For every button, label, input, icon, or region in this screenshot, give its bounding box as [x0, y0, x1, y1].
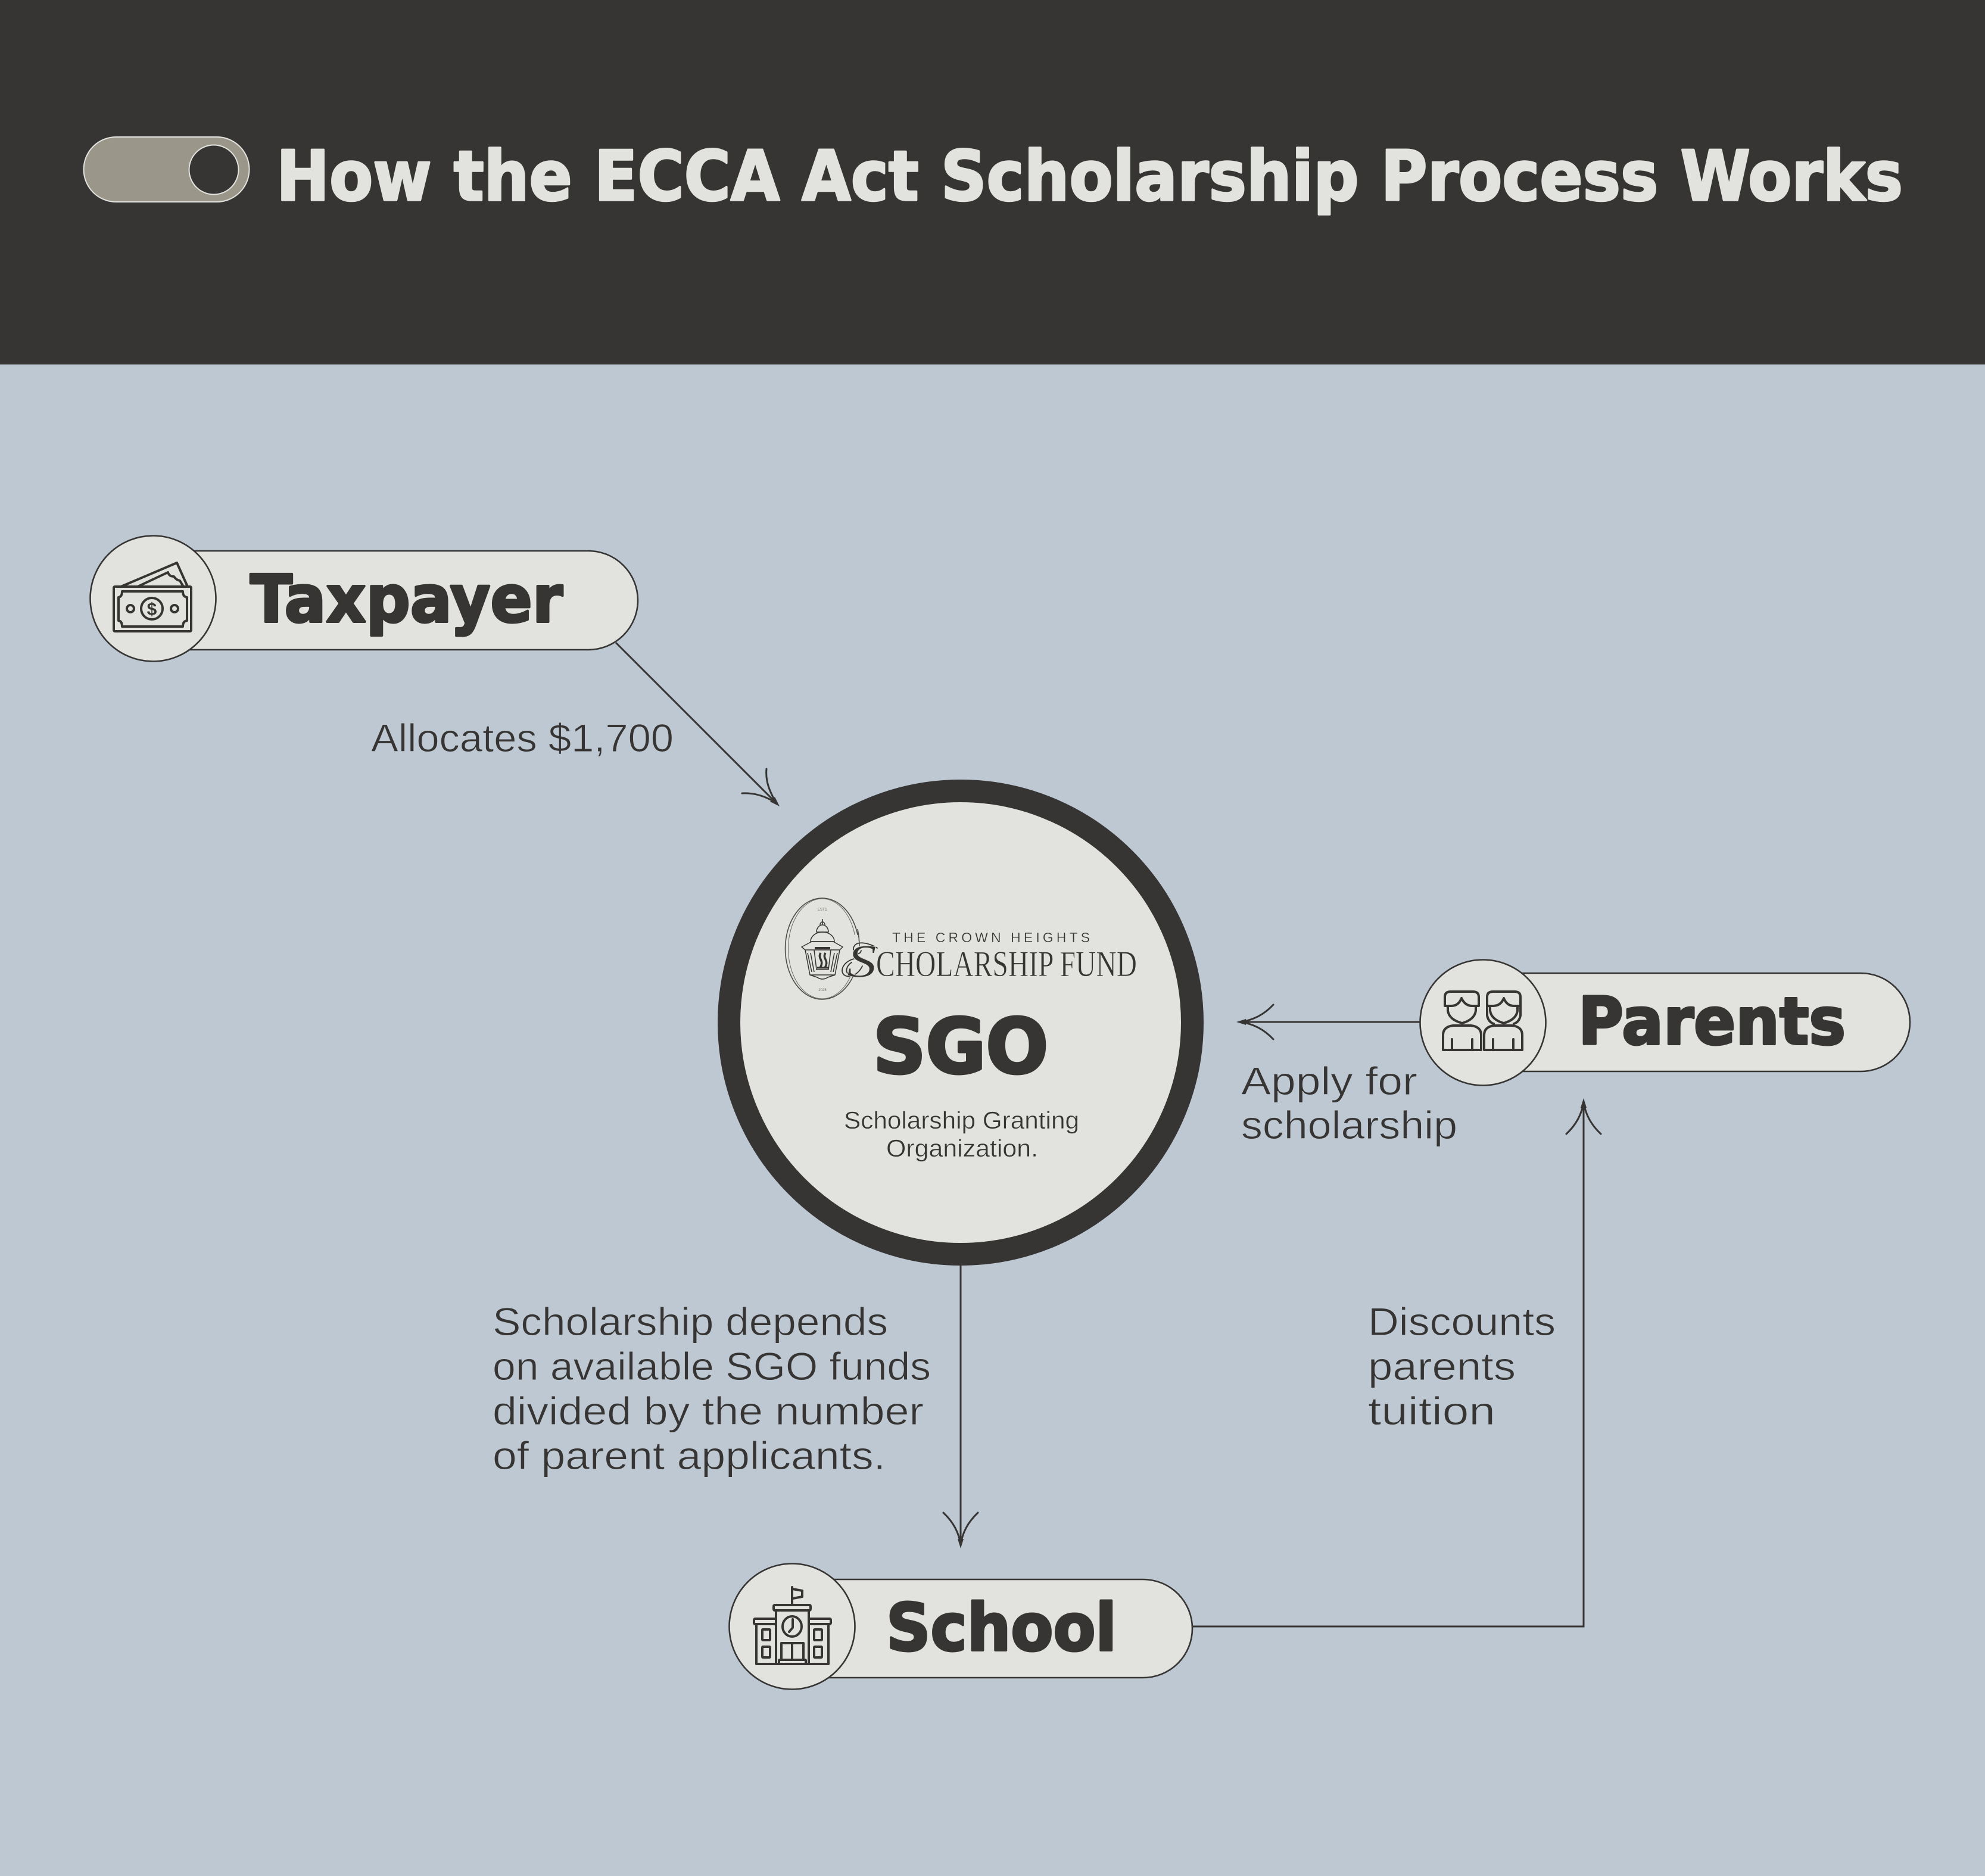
- label: scholarship depends: Scholarship depends: [493, 1300, 888, 1344]
- panel: school: [729, 1564, 1192, 1689]
- label: scholarship depends: on available SGO funds: [493, 1344, 931, 1388]
- text: SGO description: Organization.: [886, 1135, 1038, 1162]
- header band: [0, 0, 1985, 364]
- swash ornaments on script S: [842, 943, 877, 976]
- panel: parents: [1420, 960, 1910, 1085]
- label: apply for scholarship: scholarship: [1241, 1103, 1457, 1147]
- logo: Crown Heights Scholarship Fund: [785, 898, 1137, 999]
- label: school: School: [886, 1590, 1117, 1666]
- heading: SGO: SGO: [873, 1002, 1048, 1090]
- icon: money: $: [147, 600, 157, 619]
- label: apply for scholarship: Apply for: [1241, 1059, 1417, 1103]
- icon: toggle switch: [83, 137, 249, 202]
- label: scholarship depends: [493, 1300, 931, 1478]
- icon: parents: [1443, 992, 1522, 1050]
- label: scholarship depends: divided by the number: [493, 1389, 924, 1433]
- label: apply for scholarship: [1241, 1059, 1457, 1147]
- logo: Crown Heights Scholarship Fund: S: [847, 935, 877, 987]
- panel: taxpayer: [91, 536, 638, 661]
- logo: Crown Heights Scholarship Fund: CHOLARSHIP FUND: [876, 945, 1137, 984]
- label: discounts parents tuition: Discounts: [1368, 1300, 1556, 1344]
- text: SGO description: Scholarship Granting: [844, 1107, 1079, 1134]
- panel: SGO circle: [729, 791, 1192, 1254]
- logo: Crown Heights Scholarship Fund: 2025: [818, 989, 827, 992]
- label: discounts parents tuition: [1368, 1300, 1556, 1433]
- label: parents: Parents: [1578, 983, 1846, 1059]
- label: discounts parents tuition: parents: [1368, 1344, 1516, 1388]
- icon: money: [114, 563, 191, 631]
- label: scholarship depends: of parent applicants.: [493, 1434, 886, 1478]
- arrow: SGO to school: [943, 1266, 978, 1548]
- logo: Crown Heights Scholarship Fund: THE CROWN HEIGHTS: [892, 930, 1090, 945]
- icon: school building: [754, 1587, 831, 1664]
- arrow: school to parents: [1192, 1098, 1601, 1626]
- arrow: parents to SGO: [1236, 1005, 1420, 1039]
- icon: lantern: [802, 919, 843, 979]
- label: taxpayer: Taxpayer: [250, 561, 563, 637]
- label: discounts parents tuition: tuition: [1368, 1389, 1495, 1433]
- text: SGO description: [844, 1107, 1079, 1162]
- logo: Crown Heights Scholarship Fund: ESTD: [818, 908, 828, 912]
- arrow: taxpayer to SGO: [616, 643, 780, 806]
- label: allocates: Allocates $1,700: [371, 716, 674, 760]
